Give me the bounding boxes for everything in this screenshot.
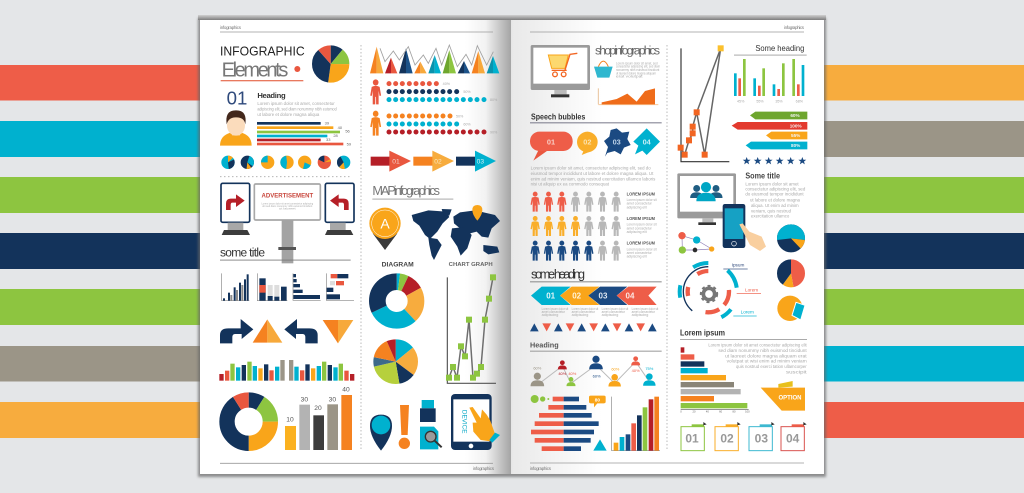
text block: Lorem ipsum dolor sit amet, consectetur adipiscing elit, sed do [531, 166, 651, 171]
dot rows: orange person: 60% [463, 122, 471, 126]
heading: speech bubbles: Speech bubbles [531, 111, 586, 121]
chevron captions: adipiscing [572, 313, 588, 317]
advertisement board: Lorem ipsum dolor sit amet consectetur adipiscing [261, 201, 313, 205]
icon: basket [594, 61, 613, 78]
bar chart: rising [612, 397, 660, 451]
triangle line chart [370, 45, 499, 73]
people network chart: 60% [611, 367, 620, 372]
text block: Lorem ipsum dolor sit amet, sed [616, 61, 658, 65]
option ribbon [761, 381, 805, 411]
running headers: infographics [784, 25, 805, 30]
people captions [627, 192, 657, 259]
icon: exclamation [399, 405, 410, 449]
horizontal bar chart: 0 [680, 410, 682, 414]
pie: red [784, 266, 798, 280]
numbered box 01 [681, 422, 707, 451]
bar chart: heading: 56 [345, 129, 351, 134]
text block, right aligned [708, 343, 808, 374]
pie: diagram [384, 350, 407, 373]
arrow: bent right [220, 319, 253, 343]
advertisement board [254, 184, 320, 263]
title: Elements [222, 60, 288, 82]
arrow bars: 100% [790, 123, 802, 128]
small chart 3 [293, 273, 321, 300]
numbered box 02 [715, 422, 741, 451]
bar chart: values: 10 [286, 417, 294, 424]
right stripes [824, 65, 1024, 438]
bar chart: rainbow [219, 360, 354, 381]
text block: consectetur adipiscing elit, sed [745, 187, 806, 192]
speech bubble 04: 04 [643, 137, 652, 146]
butterfly bar chart [531, 395, 607, 451]
text block: Lorem ipsum dolor sit amet, consectetur [257, 101, 335, 106]
text block: erat volutpat [616, 75, 643, 79]
chevrons: 02 [572, 292, 582, 301]
heading: Heading [530, 341, 662, 352]
section: top left page [220, 44, 354, 263]
people grid [531, 192, 621, 261]
section: right column lower [680, 231, 808, 451]
horizontal bar chart: 40 [706, 410, 709, 414]
section: right column upper [677, 43, 807, 254]
speech bubble 03 [604, 128, 631, 157]
ring labels: Ipsum [732, 263, 744, 268]
arrow bars: 60% [790, 113, 801, 118]
text block [745, 182, 806, 218]
chevrons: 01 [546, 292, 556, 301]
person: red [370, 79, 381, 104]
horizontal bar chart: 100 [745, 410, 750, 414]
text block: eiusmod tempor incididunt ut labore et dolore magna aliqua. Ut [531, 171, 654, 176]
bar chart: values [285, 387, 352, 450]
text block: consectetur adipiscing elit, sed diam [616, 65, 660, 69]
advertisement board: ADVERTISEMENT [261, 192, 313, 199]
heading: some title: some title [220, 246, 265, 260]
arrow 01: 01 [392, 158, 400, 165]
left stripes [0, 65, 200, 438]
butterfly bar chart: 80 [595, 397, 600, 402]
people captions: adipiscing elit [627, 255, 647, 259]
chevron captions: amet consectetur [542, 310, 566, 314]
heading: lorem ipsum [680, 328, 807, 340]
people captions: Lorem ipsum dolor sit [627, 223, 657, 227]
brochure [198, 15, 826, 477]
heading: some title: Some title [745, 171, 781, 180]
icon: phone with hand [723, 204, 766, 251]
ring labels: Lorem [745, 288, 758, 293]
text block [616, 61, 660, 79]
pie: cyan [784, 231, 798, 245]
arrow bars: 55% [791, 133, 801, 138]
text block [531, 166, 655, 187]
bar chart: heading: 28 [333, 133, 339, 138]
bar chart: values: 20 [314, 405, 322, 412]
chevron captions: Lorem ipsum dolor sit [602, 307, 628, 311]
bar chart: heading: 33 [326, 137, 331, 142]
title: INFOGRAPHIC [220, 44, 305, 59]
speech bubble 02 [577, 132, 598, 155]
arrow bars [732, 112, 807, 149]
running headers [220, 25, 805, 471]
triangle down [323, 320, 353, 343]
pie: title [321, 55, 340, 73]
heading: some title [220, 246, 351, 260]
text block, right aligned: volutpat ut wisi enim ad minim veniam [727, 359, 807, 364]
heading: some heading: some heading [531, 267, 585, 281]
title [220, 44, 305, 82]
pie: orange [777, 296, 805, 321]
people captions: LOREM IPSUM [627, 241, 655, 246]
dot rows: orange person: 50% [456, 114, 464, 118]
area chart [598, 88, 658, 105]
grouped bar chart: 35% [775, 99, 783, 103]
donut chart [227, 400, 270, 443]
text block: nisi ut aliquip ex ea commodo consequat [531, 182, 610, 187]
heading: Heading [257, 91, 286, 100]
small chart 1 [222, 273, 249, 301]
people captions: LOREM IPSUM [627, 192, 655, 197]
text block, right aligned: sed diam nonummy nibh euismod tincidunt [718, 348, 808, 353]
section: shop infographics [530, 43, 662, 261]
ring labels: Lorem [741, 309, 754, 314]
number 01: 01 [227, 87, 247, 108]
horizontal bar chart: 60 [719, 410, 723, 414]
text block: aliqua. Ut enim ad minim [751, 203, 799, 208]
people captions: amet consectetur [627, 226, 652, 230]
text block [257, 101, 337, 117]
dot rows: orange person: 90% [490, 130, 498, 134]
icon: person [220, 110, 252, 146]
heading: some heading [530, 267, 662, 282]
horizontal bar chart: 80 [733, 410, 736, 414]
text block: ut laoreet dolore magna aliquam [616, 71, 656, 75]
dot rows: red person: 40% [443, 82, 451, 86]
heading: MAP infographics: MAPinfographics [372, 184, 440, 198]
world map [412, 209, 500, 260]
chevron captions: adipiscing [632, 313, 648, 317]
text block: nonummy nibh euismod tincidunt [616, 68, 659, 72]
icon: pin A [369, 208, 401, 250]
numbered box 04: 04 [786, 432, 800, 446]
icon: map pin [472, 205, 482, 221]
dot rows: red person: 80% [490, 98, 498, 102]
chevron captions: amet consectetur [632, 310, 656, 314]
horizontal bar chart [680, 347, 750, 414]
stars row [743, 157, 806, 164]
heading: lorem ipsum: Lorem ipsum [680, 328, 725, 337]
small chart 4 [326, 273, 354, 300]
arrow 03 [456, 151, 496, 172]
bar chart: values: 40 [342, 387, 350, 394]
arrow 02 [413, 151, 454, 172]
chevron captions: amet consectetur [602, 310, 626, 314]
numbered box 04 [781, 422, 807, 451]
small pies row [225, 159, 347, 166]
people captions: Lorem ipsum dolor sit [627, 247, 657, 251]
grouped bar chart: 68% [796, 99, 804, 103]
icon: tablet with hand: DEVICE [461, 410, 468, 433]
heading: shop infographics: shopinfographics [595, 43, 660, 57]
line chart: orange [678, 45, 729, 162]
icon: usb [420, 400, 436, 422]
dot rows: orange person [386, 113, 498, 134]
chevrons: 04 [626, 292, 635, 301]
chevrons [531, 287, 657, 305]
heading: some heading [734, 43, 807, 55]
bar chart: heading: 40 [338, 125, 343, 130]
icon: document search [420, 427, 442, 449]
speech bubble 01 [530, 132, 573, 161]
people network chart [531, 356, 656, 386]
triangle up [253, 319, 282, 343]
small chart 2 [257, 273, 287, 301]
bar chart: heading: 39 [325, 121, 330, 126]
speech bubble 02: 02 [583, 137, 591, 146]
people captions: Lorem ipsum dolor sit [627, 198, 657, 202]
numbered box 03: 03 [755, 432, 768, 446]
section: triangles, dots, arrows [369, 45, 500, 260]
label: diagram: DIAGRAM [382, 262, 414, 269]
ring labels [723, 263, 761, 316]
chevron captions: adipiscing [542, 313, 558, 317]
dot rows: red person: 50% [463, 90, 471, 94]
people network chart: 40% [568, 371, 577, 376]
people captions: LOREM IPSUM [627, 216, 655, 221]
dot rows: red person [386, 81, 498, 102]
icon: location pin [370, 415, 392, 451]
right billboard [325, 183, 354, 235]
text block: adipiscing elit, sed diam nonummy nibh euismod [257, 107, 337, 112]
option ribbon: OPTION [779, 396, 801, 402]
line chart: chart graph [446, 274, 496, 383]
numbered box 01: 01 [685, 432, 699, 446]
left billboard [221, 183, 250, 235]
text block: veniam, quis nostrud [751, 208, 792, 213]
chevron captions: Lorem ipsum dolor sit [542, 307, 568, 311]
grouped bar chart [734, 59, 804, 103]
chevron captions: adipiscing [602, 313, 618, 317]
grouped bar chart: 55% [756, 99, 764, 103]
page rules [220, 32, 804, 463]
people network chart: 40% [558, 371, 567, 376]
icon: network dots [678, 232, 714, 254]
chevron captions [542, 307, 658, 317]
label: chart graph: CHART GRAPH [449, 262, 493, 268]
running headers: infographics [530, 466, 552, 471]
advertisement board: ut laoreet [279, 207, 296, 211]
arrow 01 [371, 151, 411, 172]
people captions: amet consectetur [627, 202, 652, 206]
arrow: bent left [284, 319, 318, 343]
section: some heading, chevrons, network [530, 267, 662, 451]
grouped bar chart: 45% [737, 99, 745, 103]
horizontal bar chart: 20 [693, 410, 696, 414]
icon: monitor with team [677, 173, 736, 225]
people captions: amet consectetur [627, 251, 652, 255]
text block: Lorem ipsum dolor sit amet [745, 182, 799, 187]
donut: diagram [377, 282, 416, 320]
people network chart: 60% [533, 365, 542, 370]
running headers: infographics [220, 25, 242, 30]
people network chart: 60% [593, 373, 601, 378]
ring diagram with gear [680, 263, 737, 320]
bar chart: heading [257, 121, 352, 146]
bar chart: heading: 59 [347, 141, 352, 146]
arrow bars: 80% [791, 143, 801, 148]
people captions: adipiscing elit [627, 205, 647, 209]
advertisement board: elit sed diam nonummy nibh euismod tincidunt [262, 204, 312, 208]
people captions: adipiscing elit [627, 230, 647, 234]
section: diagrams and icons [370, 262, 500, 451]
people network chart: 40% [632, 368, 640, 373]
text block, right aligned: ut laoreet dolore magna aliquam erat [725, 353, 808, 358]
heading: Heading: Heading [530, 341, 559, 350]
arrow 02: 02 [434, 158, 442, 165]
heading: some heading: Some heading [755, 43, 805, 53]
text block, right aligned: suscipit [786, 369, 808, 374]
chevron captions: amet consectetur [572, 310, 596, 314]
stand foot [278, 247, 296, 250]
text block, right aligned: quis nostrud exerci tation ullamcorper [736, 364, 807, 369]
chevrons: 03 [599, 292, 608, 301]
text block: ut labore et dolore magna [750, 198, 801, 203]
text block: enim ad minim veniam, quis nostrud exercitation ullamco laboris [531, 176, 655, 181]
text block, right aligned: Lorem ipsum dolor sit amet consectetur adipiscing elit [708, 343, 807, 348]
text block: do eiusmod tempor incididunt [745, 192, 804, 197]
chevron captions: Lorem ipsum dolor sit [632, 307, 658, 311]
running headers: infographics [473, 466, 495, 471]
heading: speech bubbles [530, 111, 662, 123]
text block: exercitation ullamco [751, 213, 790, 218]
speech bubble 01: 01 [547, 137, 555, 146]
chevron captions: Lorem ipsum dolor sit [572, 307, 598, 311]
numbered box 03 [749, 422, 775, 451]
speech bubble 04 [633, 128, 660, 155]
arrow 03: 03 [477, 158, 484, 165]
people network chart: 75% [645, 366, 654, 371]
icon: monitor with cart [531, 45, 590, 97]
icon: pin A: A [380, 215, 390, 231]
section: infographic charts, left page lower [219, 246, 354, 450]
icon: tablet with hand [451, 394, 500, 450]
person: orange [370, 111, 381, 136]
speech bubble 03: 03 [613, 137, 621, 146]
numbered box 02: 02 [720, 432, 734, 446]
bar chart: values: 30 [301, 396, 308, 403]
triangles row [530, 323, 657, 331]
bar chart: values: 30 [329, 396, 336, 403]
text block: ut labore et dolore magna aliqua [257, 112, 320, 117]
